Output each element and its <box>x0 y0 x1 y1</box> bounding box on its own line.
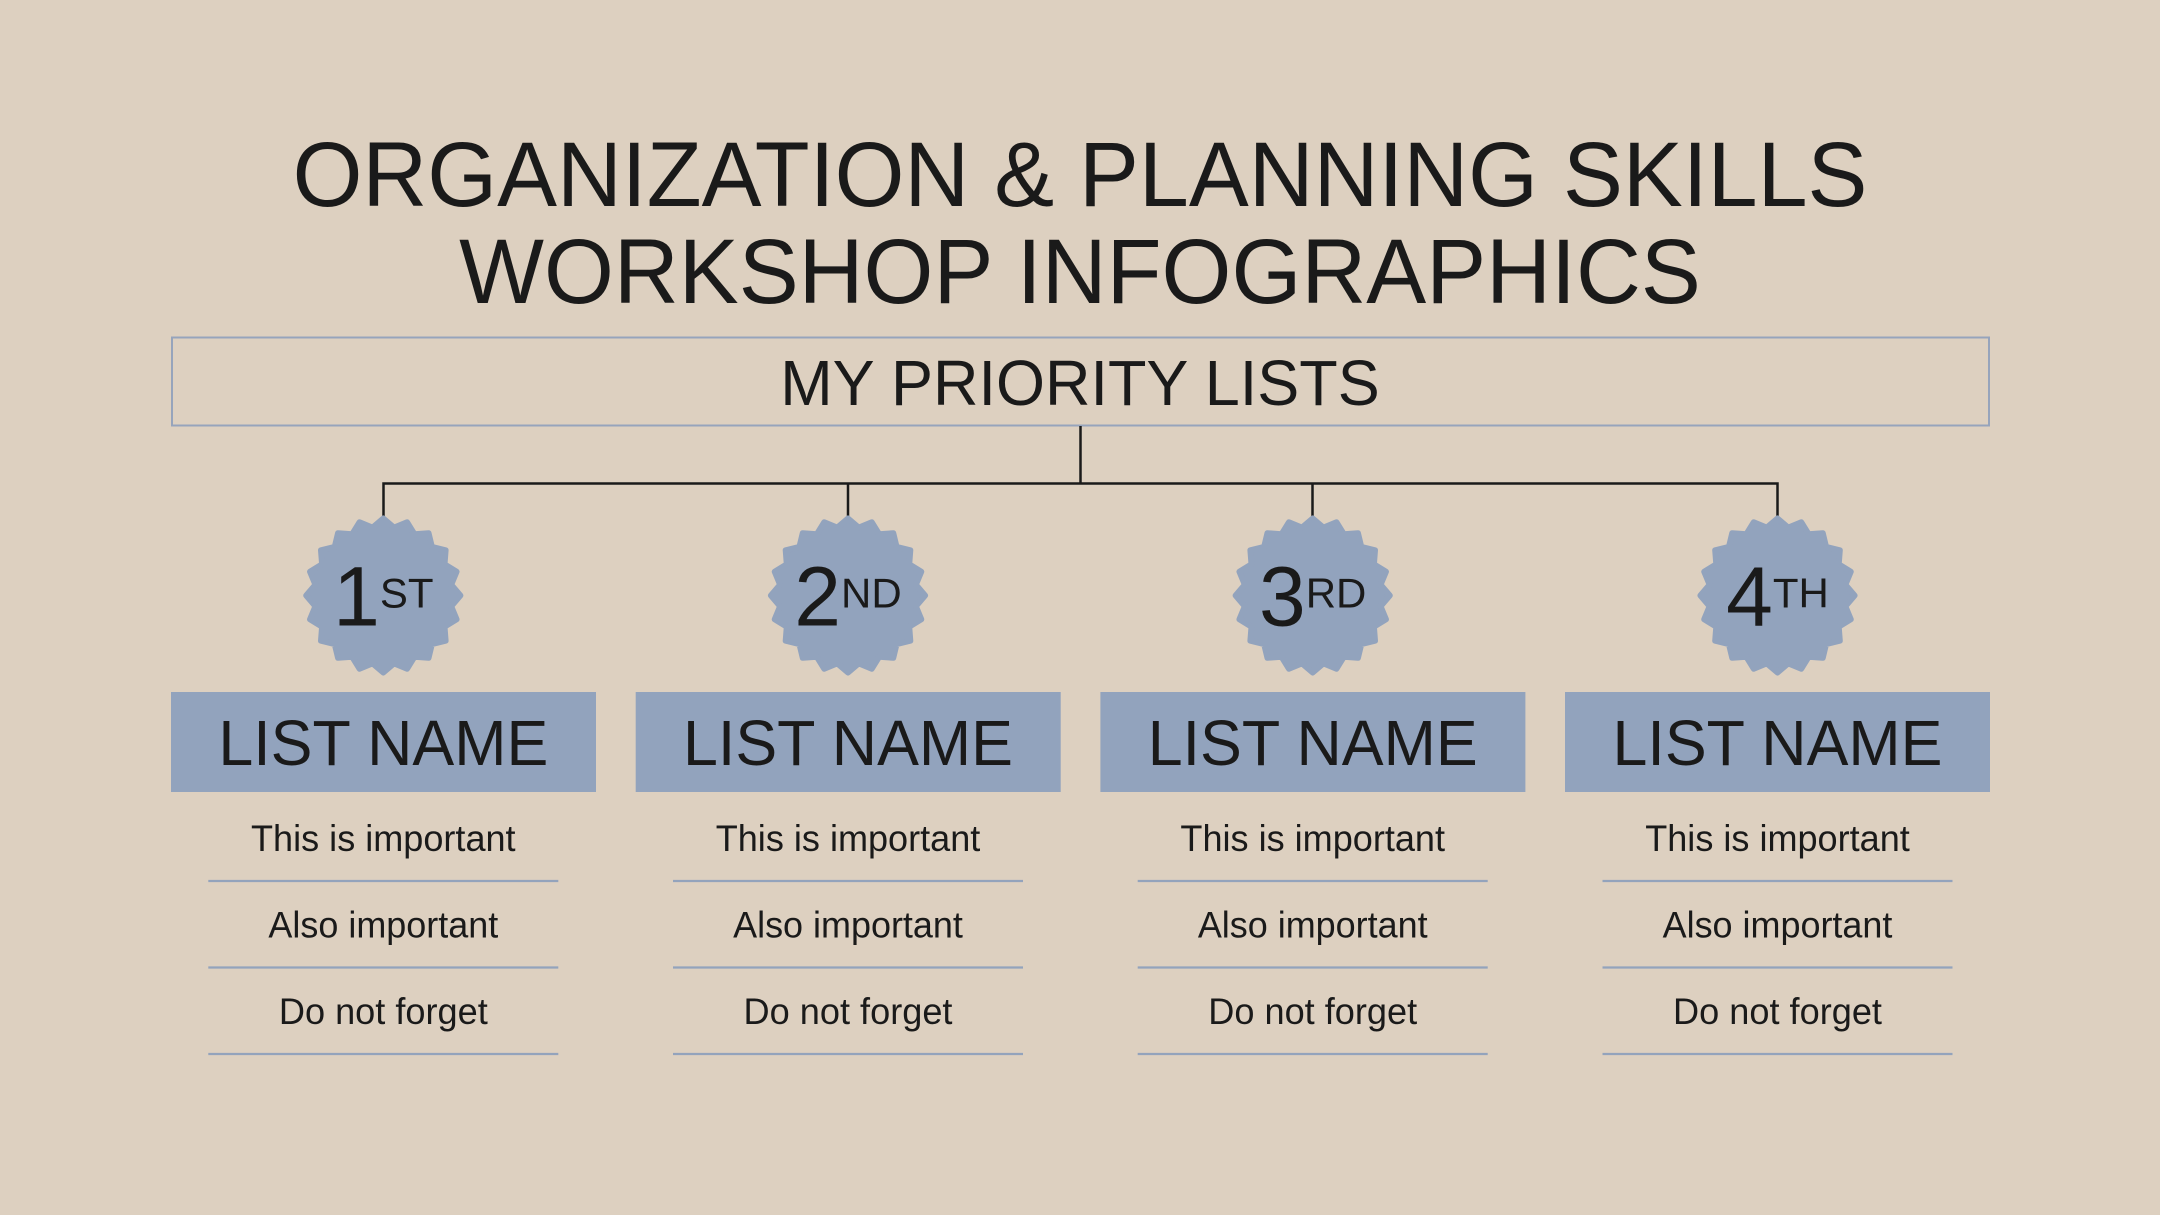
list 4 items: Do not forget <box>1673 991 1882 1032</box>
panel: list 4 <box>1565 518 1990 1054</box>
list 3 items: This is important <box>1180 818 1445 859</box>
badge: 1st: 1 <box>333 550 380 644</box>
list 2 items: Do not forget <box>744 991 952 1032</box>
badge: 3rd: 3 <box>1259 550 1306 644</box>
panel: list 2 <box>636 518 1061 1054</box>
badge: 4th <box>1700 518 1854 672</box>
connector lines <box>384 426 1778 516</box>
list 2 heading: LIST NAME <box>683 708 1013 779</box>
badge: 1st <box>306 518 460 672</box>
badge: 2nd: 2 <box>794 550 841 644</box>
list 1 heading <box>171 692 596 792</box>
list 3 items: Do not forget <box>1208 991 1417 1032</box>
list 2 items: This is important <box>716 818 980 859</box>
list 1 items: Do not forget <box>279 991 488 1032</box>
badge: 2nd: ND <box>841 570 902 616</box>
panel: my priority lists banner <box>172 338 1989 426</box>
list 2 heading <box>636 692 1061 792</box>
list 2 items <box>673 818 1023 1054</box>
badge: 4th: TH <box>1773 570 1829 616</box>
list 3 items <box>1138 818 1488 1054</box>
list 4 heading <box>1565 692 1990 792</box>
list 2 items: Also important <box>733 904 963 946</box>
badge: 3rd <box>1236 518 1390 672</box>
title: ORGANIZATION & PLANNING SKILLS <box>293 124 1867 226</box>
list 1 heading: LIST NAME <box>218 708 548 779</box>
list 1 items <box>208 818 558 1054</box>
badge: 4th: 4 <box>1726 550 1773 644</box>
list 3 items: Also important <box>1198 904 1428 946</box>
badge: 2nd <box>771 518 925 672</box>
list 1 items: This is important <box>251 818 516 859</box>
list 4 items: This is important <box>1645 818 1910 859</box>
panel: my priority lists banner: MY PRIORITY LISTS <box>780 349 1380 419</box>
list 1 items: Also important <box>268 904 498 946</box>
title: WORKSHOP INFOGRAPHICS <box>459 221 1701 323</box>
list 3 heading <box>1100 692 1525 792</box>
list 4 heading: LIST NAME <box>1613 708 1942 779</box>
list 4 items: Also important <box>1663 904 1892 946</box>
list 3 heading: LIST NAME <box>1148 708 1478 779</box>
panel: list 3 <box>1100 518 1525 1054</box>
badge: 1st: ST <box>380 570 433 616</box>
panel: list 1 <box>171 518 596 1054</box>
title <box>293 124 1867 323</box>
list 4 items <box>1602 818 1952 1054</box>
badge: 3rd: RD <box>1306 570 1366 616</box>
